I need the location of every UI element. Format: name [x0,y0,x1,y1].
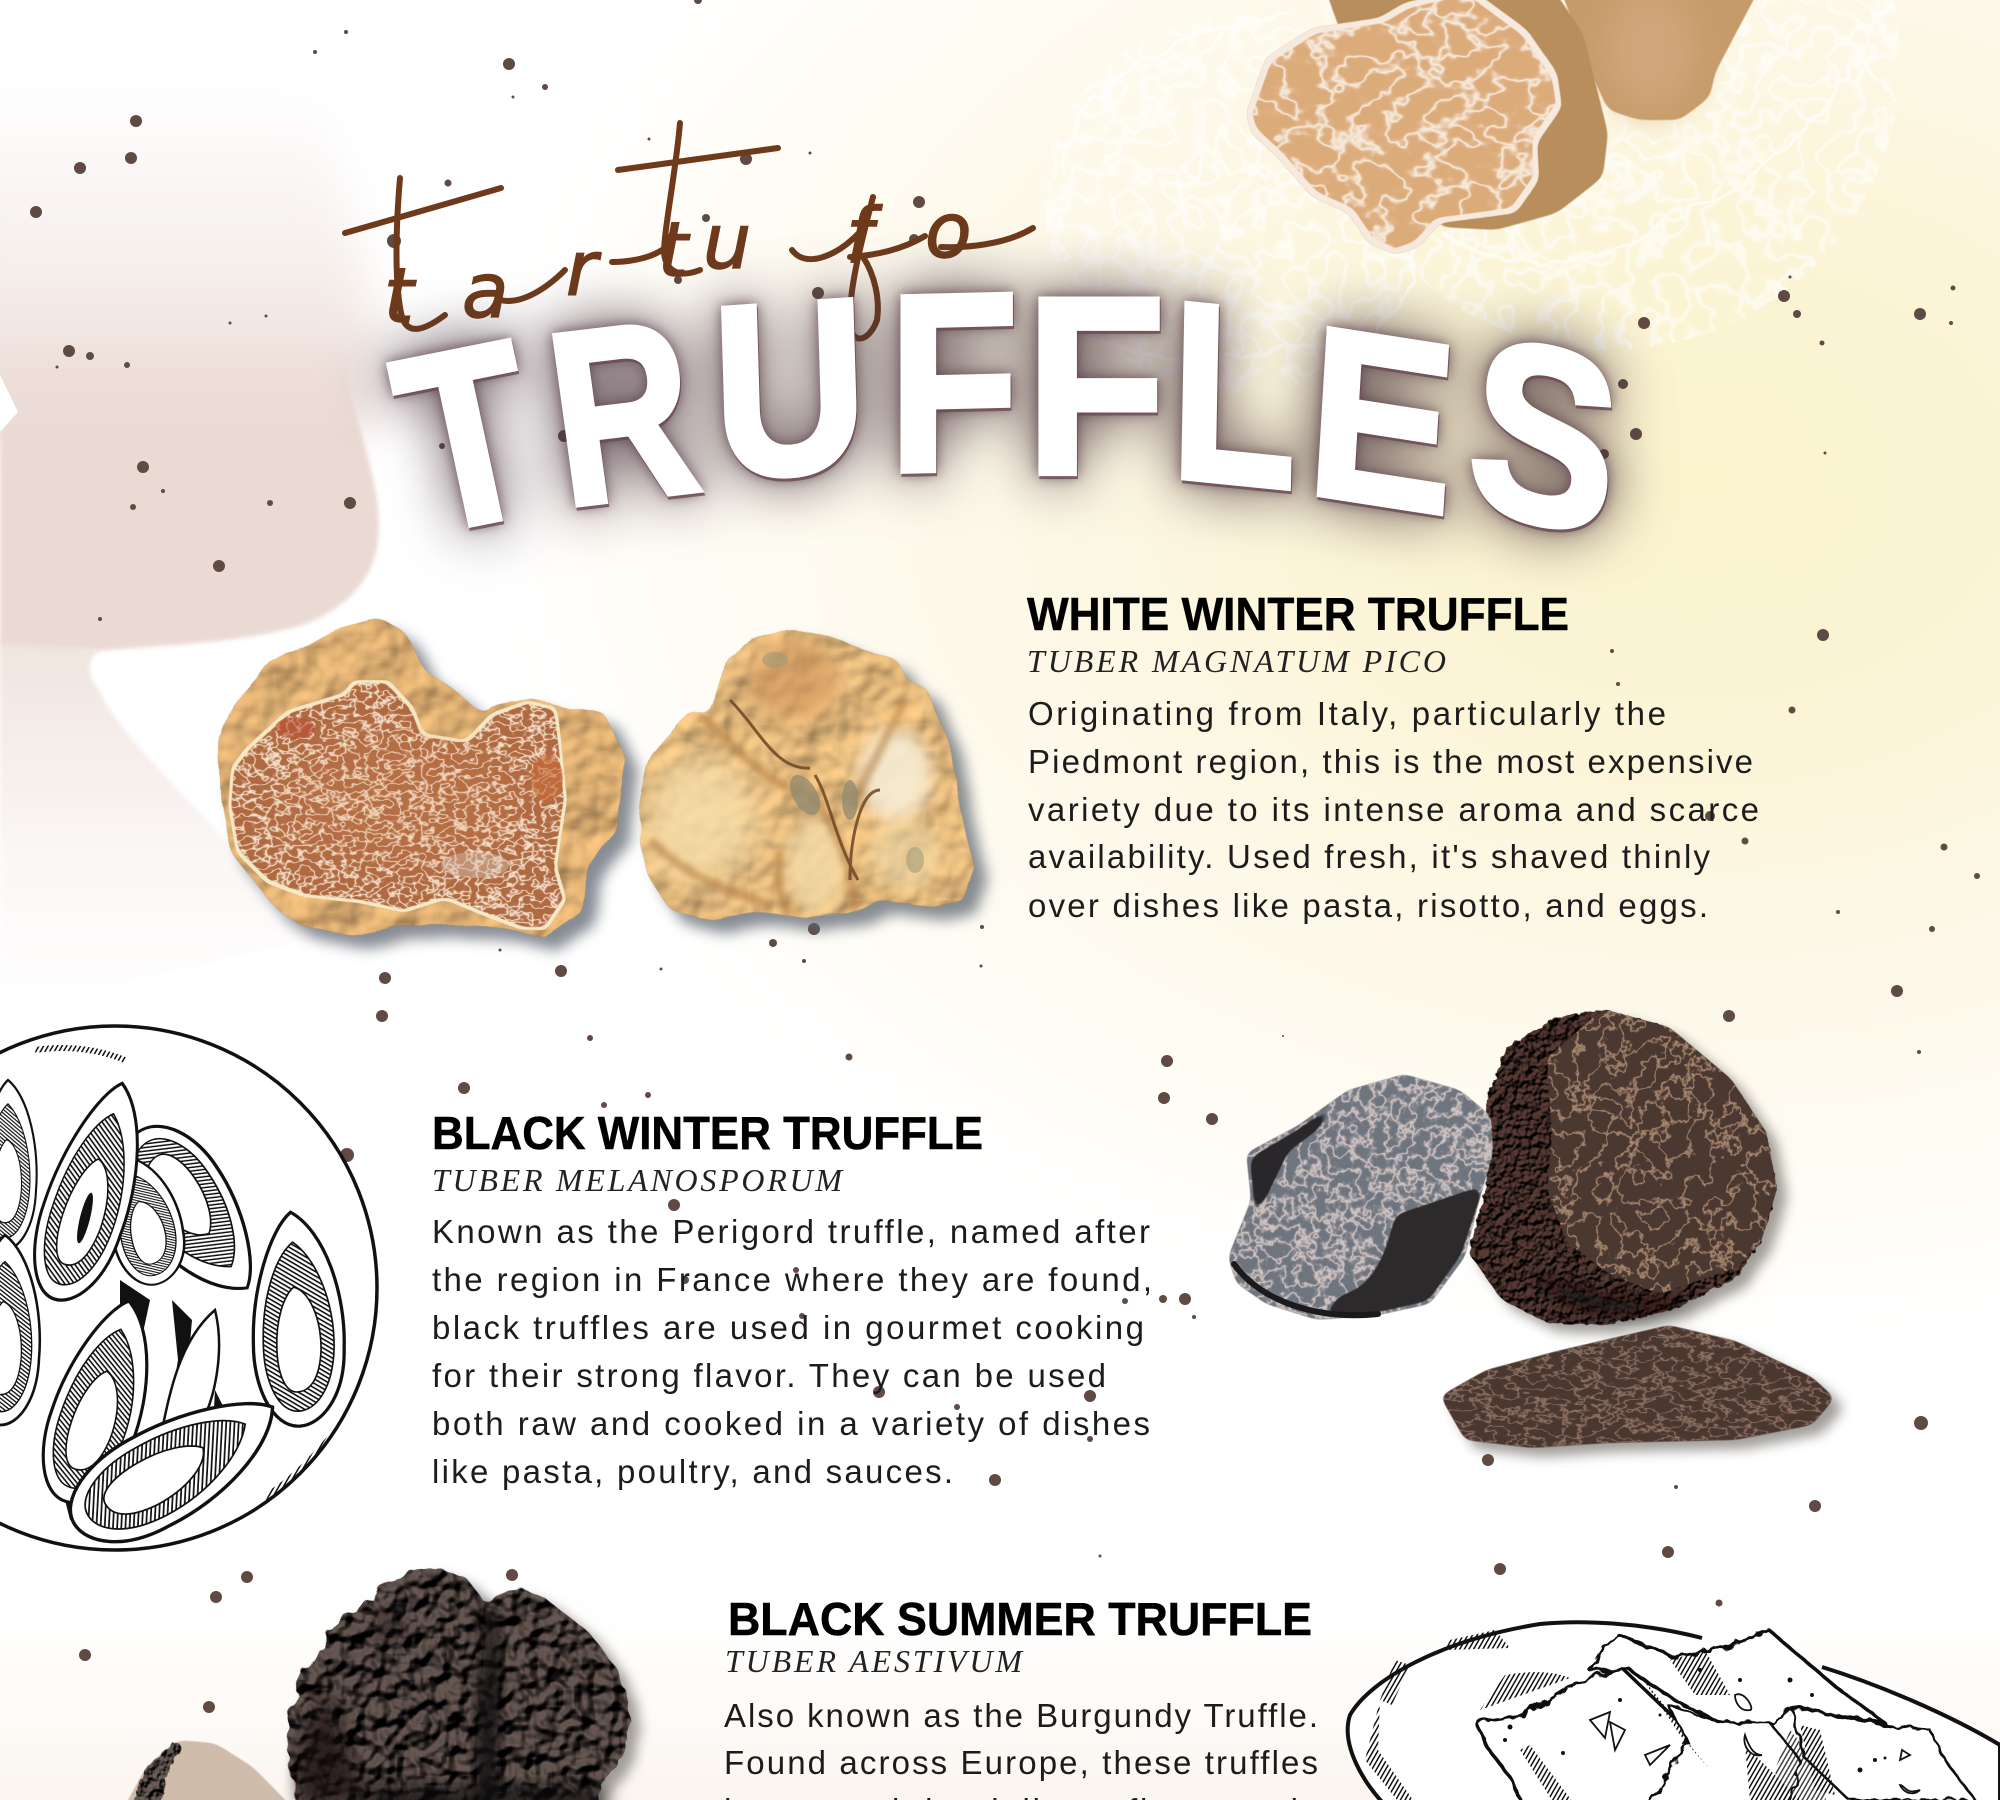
illustration: watercolour white truffle top right [1246,0,1764,255]
section: white winter truffle [1027,588,1759,924]
title: script word tartufo: tartufo [384,186,972,340]
photo: black summer truffle whole [284,1567,630,1800]
description: both raw and cooked in a variety of dishes [432,1405,1150,1442]
section: black winter truffle [432,1107,1152,1490]
description: like pasta, poultry, and sauces. [432,1453,953,1490]
title: TRUFFLES arched lettering: E [1302,275,1462,566]
photo: white winter truffle halved [218,618,626,938]
title: TRUFFLES arched lettering: S [1459,281,1630,590]
photo: white winter truffle whole [639,628,976,920]
description: the region in France where they are found, [432,1261,1152,1298]
description: Known as the Perigord truffle, named after [432,1213,1150,1250]
description: Piedmont region, this is the most expensive [1028,743,1753,780]
description [432,1213,1152,1490]
heading: BLACK SUMMER TRUFFLE [728,1593,1312,1645]
photo: black winter truffle flat slice [1440,1325,1835,1448]
line art: ravioli on plate [1348,1622,2000,1800]
description: availability. Used fresh, it's shaved thinly [1028,838,1710,875]
description: Also known as the Burgundy Truffle. [724,1697,1318,1734]
title: script word tartufo [345,123,1033,340]
latin name: TUBER MELANOSPORUM [432,1162,844,1198]
faint line-art truffle behind title [1045,0,1900,395]
description: over dishes like pasta, risotto, and eggs. [1028,887,1708,924]
description [1028,695,1759,924]
heading: BLACK WINTER TRUFFLE [432,1107,983,1159]
photo: black winter truffle half [1468,1009,1777,1325]
heading: WHITE WINTER TRUFFLE [1027,588,1569,640]
title: TRUFFLES arched lettering: L [1169,248,1299,542]
description: Found across Europe, these truffles [724,1744,1318,1781]
title: TRUFFLES arched lettering [375,242,1630,590]
illustration: grey watercolour truffle slice [1228,1074,1493,1320]
title: TRUFFLES arched lettering: R [535,269,711,559]
description: variety due to its intense aroma and scarce [1028,791,1759,828]
description: black truffles are used in gourmet cooking [432,1309,1144,1346]
description [724,1697,1318,1800]
photo: black summer truffle sliced piece [120,1740,300,1800]
description: for their strong flavor. They can be used [432,1357,1106,1394]
title: TRUFFLES arched lettering: U [709,246,870,530]
title: TRUFFLES arched lettering: T [375,288,559,586]
latin name: TUBER AESTIVUM [725,1643,1024,1679]
section: black summer truffle [724,1593,1318,1800]
line art: mussels on plate [0,1026,377,1569]
title: TRUFFLES arched lettering: F [889,242,1018,525]
title: TRUFFLES arched lettering: F [1026,244,1165,526]
description: Originating from Italy, particularly the [1028,695,1666,732]
latin name: TUBER MAGNATUM PICO [1027,643,1446,679]
